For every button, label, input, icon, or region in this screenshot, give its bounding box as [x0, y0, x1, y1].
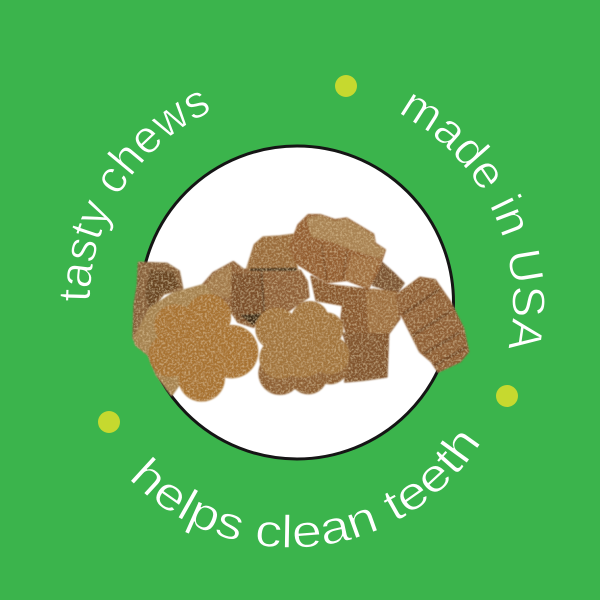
chew: right tilted: [397, 278, 468, 372]
chew: back top: [247, 235, 297, 270]
chew: middle back: [202, 262, 308, 327]
chew: front left rim: [134, 285, 230, 395]
chew: top: [290, 215, 385, 288]
chew: middle front: [255, 301, 349, 395]
chew: lower right: [343, 333, 388, 382]
text: tasty chews: tasty chews: [60, 92, 209, 300]
chew: far back right: [373, 260, 403, 292]
text: helps clean teeth: helps clean teeth: [131, 433, 480, 548]
chew: far left: [134, 263, 182, 338]
dot: right: [496, 385, 518, 407]
white circle with black outline: [140, 146, 454, 459]
chew: middle right: [312, 277, 399, 334]
chew: front left face: [149, 294, 258, 402]
dot: top: [335, 75, 357, 97]
text: made in USA: made in USA: [400, 94, 544, 348]
photo: dog chews: [134, 215, 468, 402]
dot: left: [98, 411, 120, 433]
